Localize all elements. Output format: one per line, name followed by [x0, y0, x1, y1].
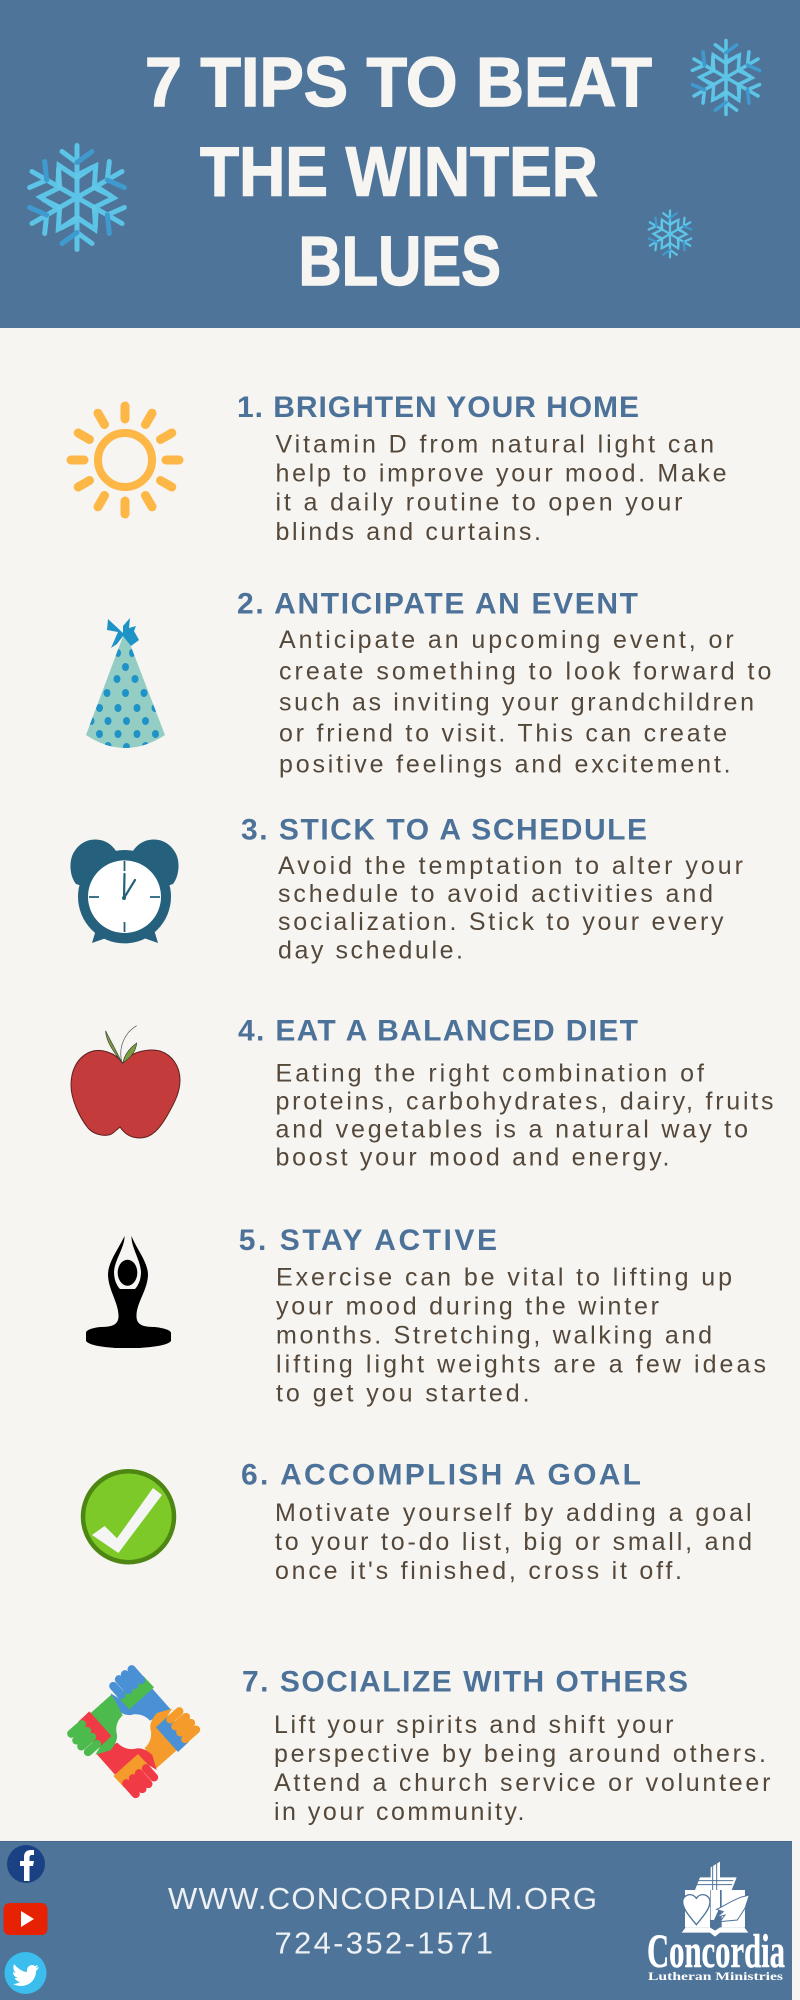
panel: tip 1 brighten your home — [71, 391, 726, 546]
text: tip 7: perspective by being around others. — [274, 1740, 766, 1768]
heading: tip 6: 6. ACCOMPLISH A GOAL — [241, 1459, 641, 1492]
logo: concordia lutheran ministries — [647, 1862, 785, 1983]
icon: large snowflake — [22, 146, 132, 250]
phone number: 724-352-1571 — [274, 1925, 493, 1960]
icon: youtube — [4, 1903, 48, 1935]
text: tip 6: once it's finished, cross it off. — [275, 1557, 682, 1585]
website: WWW.CONCORDIALM.ORG — [168, 1881, 597, 1916]
text: tip 6: to your to-do list, big or small, and — [275, 1528, 752, 1556]
text: tip 4: and vegetables is a natural way to — [276, 1115, 748, 1143]
panel: footer — [0, 1841, 792, 2000]
panel: tip 5 stay active — [86, 1224, 766, 1407]
text: tip 4: Eating the right combination of — [276, 1060, 704, 1088]
text: tip 3: Avoid the temptation to alter your — [278, 852, 743, 880]
text: tip 2 — [279, 626, 771, 779]
text: tip 1: blinds and curtains. — [276, 518, 541, 546]
icon: apple — [71, 1026, 180, 1138]
text: tip 5 — [276, 1263, 766, 1407]
heading: tip 1: 1. BRIGHTEN YOUR HOME — [237, 391, 639, 424]
text: tip 3: schedule to avoid activities and — [278, 880, 713, 908]
text: tip 3: day schedule. — [278, 936, 463, 964]
panel: tip 4 eat a balanced diet — [71, 1015, 774, 1171]
panel: tip 2 anticipate an event — [86, 587, 771, 779]
text: tip 7 — [274, 1711, 770, 1826]
text: tip 1: it a daily routine to open your — [276, 489, 682, 517]
text: tip 2: Anticipate an upcoming event, or — [279, 626, 734, 654]
text: tip 5: to get you started. — [276, 1379, 530, 1407]
title: BLUES — [298, 222, 501, 300]
icon: twitter — [4, 1952, 46, 1994]
text: tip 5: months. Stretching, walking and — [276, 1321, 712, 1349]
icon: facebook — [7, 1845, 45, 1883]
icon: green check mark — [83, 1471, 174, 1562]
icon: party hat — [86, 618, 165, 751]
icon: meditating figure — [86, 1236, 171, 1348]
heading: tip 2: 2. ANTICIPATE AN EVENT — [237, 587, 638, 620]
icon: small snowflake — [645, 211, 695, 257]
title — [145, 43, 652, 300]
text: tip 5: Exercise can be vital to lifting up — [276, 1263, 732, 1291]
text: tip 2: create something to look forward to — [279, 657, 771, 685]
logo emblem — [682, 1862, 749, 1937]
title: THE WINTER — [200, 132, 598, 210]
text: tip 7: in your community. — [274, 1798, 524, 1826]
icon: top right snowflake — [687, 41, 765, 114]
text: tip 3 — [278, 852, 743, 964]
text: tip 1 — [276, 431, 726, 546]
title: 7 TIPS TO BEAT — [145, 43, 652, 121]
icon: sun — [71, 406, 179, 514]
text: tip 4 — [276, 1060, 774, 1171]
icon: alarm clock — [70, 840, 179, 943]
panel: tip 6 accomplish a goal — [83, 1459, 752, 1585]
panel: tip 3 stick to a schedule — [70, 813, 743, 964]
heading: tip 3: 3. STICK TO A SCHEDULE — [241, 813, 647, 846]
text: tip 6 — [275, 1499, 752, 1585]
panel: tip 7 socialize with others — [71, 1665, 770, 1826]
text: tip 2: positive feelings and excitement. — [279, 751, 731, 779]
text: tip 3: socialization. Stick to your every — [278, 908, 724, 936]
heading: tip 4: 4. EAT A BALANCED DIET — [238, 1015, 638, 1048]
text: tip 4: boost your mood and energy. — [276, 1143, 670, 1171]
heading: tip 7: 7. SOCIALIZE WITH OTHERS — [242, 1665, 688, 1698]
text: tip 1: help to improve your mood. Make — [276, 460, 726, 488]
text: tip 7: Lift your spirits and shift your — [274, 1711, 674, 1739]
text: tip 5: lifting light weights are a few ideas — [276, 1350, 766, 1378]
text: tip 2: such as inviting your grandchildren — [279, 689, 754, 717]
text: tip 7: Attend a church service or volunteer — [274, 1769, 770, 1797]
icon: four joined hands — [71, 1669, 196, 1794]
text: tip 5: your mood during the winter — [276, 1292, 659, 1320]
panel: header — [0, 0, 800, 328]
text: tip 2: or friend to visit. This can create — [279, 720, 727, 748]
logo: concordia lutheran ministries: Lutheran Ministries — [648, 1969, 783, 1983]
text: tip 4: proteins, carbohydrates, dairy, fruits — [276, 1087, 774, 1115]
heading: tip 5: 5. STAY ACTIVE — [239, 1224, 497, 1257]
text: tip 6: Motivate yourself by adding a goal — [275, 1499, 752, 1527]
text: tip 1: Vitamin D from natural light can — [276, 431, 714, 459]
